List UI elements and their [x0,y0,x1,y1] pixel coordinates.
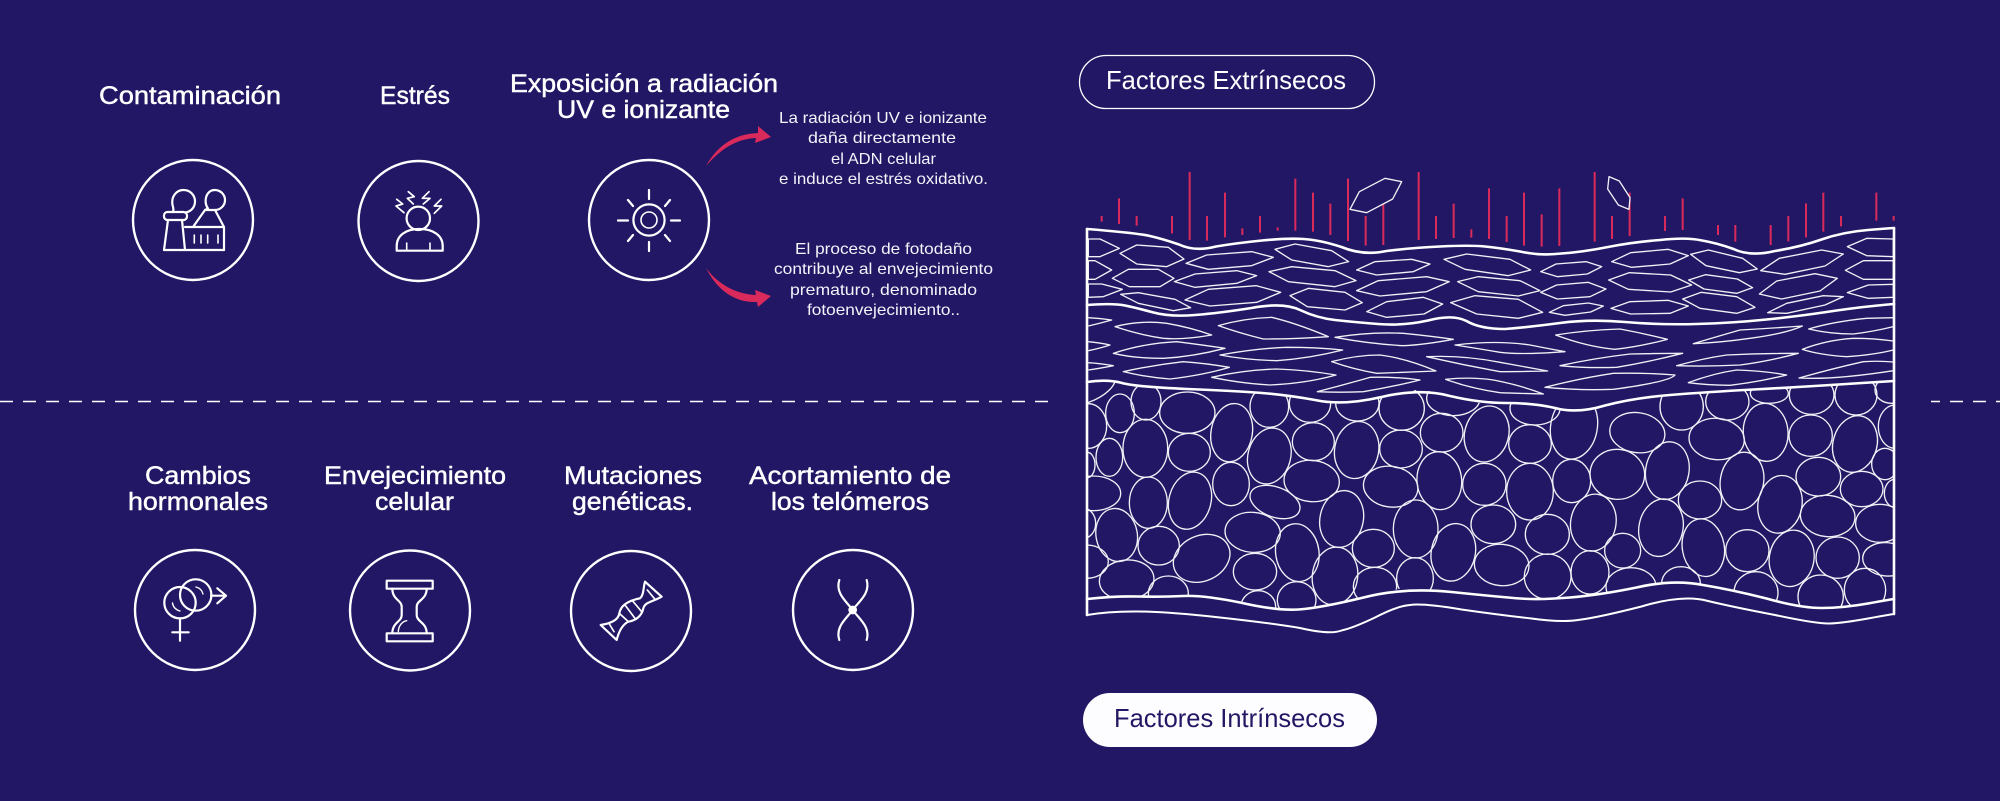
icon: DNA helix [571,551,691,671]
text block: radiation damage: el ADN celular [831,151,937,168]
text block: photoaging: contribuye al envejecimiento [774,261,993,278]
text block: radiation damage: La radiación UV e ionizante [779,110,987,127]
panel: intrinsic factors [128,462,951,671]
deep layer round cells [1047,363,1912,623]
text block: radiation damage [779,110,988,188]
heading: Mutaciones genéticas: genéticas. [572,488,693,516]
heading: Acortamiento de los telómeros: Acortamiento de [749,462,951,490]
label pill: Factores Intrínsecos: Factores Intrínsecos [1114,703,1345,733]
heading: Acortamiento de los telómeros: los telómeros [771,488,929,516]
text block: photoaging: prematuro, denominado [790,282,977,299]
icon: hourglass [350,550,470,670]
arrow: upper red arrow [706,126,771,166]
heading: Envejecimiento celular [324,462,506,516]
UV rays: left part [1102,172,1489,246]
heading: Exposición a radiación UV e ionizante: UV e ionizante [557,96,730,124]
heading: Cambios hormonales: hormonales [128,488,268,516]
icon: stressed person [358,161,478,281]
heading: Exposición a radiación UV e ionizante [510,70,778,124]
upper layer cells: right [1541,238,1893,390]
chart: skin cross-section [1047,172,1912,632]
label pill: Factores Extrínsecos [1080,56,1374,108]
icon: gender hormones [135,550,255,670]
heading: Cambios hormonales: Cambios [145,462,251,490]
heading: Envejecimiento celular: celular [375,488,454,516]
heading: Mutaciones genéticas: Mutaciones [564,462,702,490]
icon: factory [133,160,253,280]
icon: sun radiation [589,160,709,280]
panel: extrinsic factors [99,70,993,319]
heading: Acortamiento de los telómeros [749,462,951,516]
upper layer cells: left [1088,239,1565,394]
detached skin flake: left [1350,178,1402,213]
heading: Mutaciones genéticas [564,462,702,516]
icon: chromosome telomeres [793,550,913,670]
label pill: Factores Extrínsecos: Factores Extrínsecos [1106,65,1346,95]
skin layer boundary lines [1087,228,1894,632]
arrow: lower red arrow [706,268,771,307]
text block: radiation damage: daña directamente [808,130,956,147]
UV rays: right part [1507,172,1894,247]
heading: Exposición a radiación UV e ionizante: Exposición a radiación [510,70,778,98]
text block: photoaging: El proceso de fotodaño [795,241,972,258]
detached skin flake: right [1608,177,1630,209]
heading: Estrés: Estrés [380,82,450,110]
text block: radiation damage: e induce el estrés oxidativo. [779,171,988,188]
text block: photoaging: fotoenvejecimiento.. [807,302,960,319]
heading: Cambios hormonales [128,462,268,516]
heading: Contaminación: Contaminación [99,82,281,110]
label pill: Factores Intrínsecos [1083,693,1377,747]
divider: dashed line [0,400,2000,402]
text block: photoaging [774,241,993,319]
heading: Envejecimiento celular: Envejecimiento [324,462,506,490]
